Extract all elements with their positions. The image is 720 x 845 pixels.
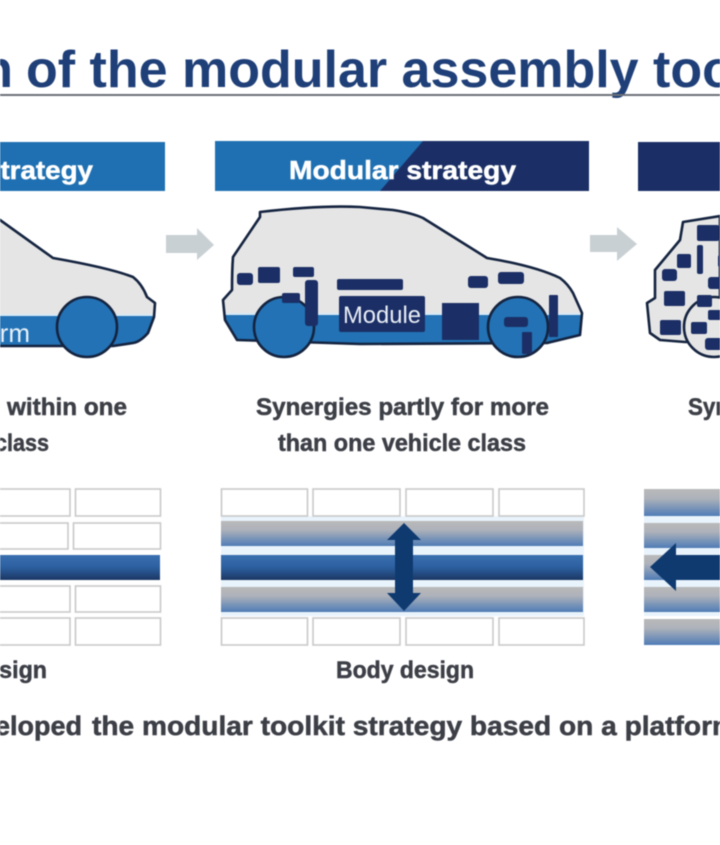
diagram: platform body design grid xyxy=(0,489,160,645)
module blocks xyxy=(237,267,558,354)
panel: modular toolkit strategy xyxy=(638,142,720,645)
arrow: modular to toolkit xyxy=(590,227,637,261)
diagram: toolkit body design stripes xyxy=(644,489,720,645)
arrow: platform to modular xyxy=(166,228,214,260)
footer statement: the modular toolkit strategy based on a platform xyxy=(92,711,720,741)
caption: platform strategy xyxy=(0,394,127,457)
car: platform strategy xyxy=(0,213,165,357)
car: toolkit strategy xyxy=(647,216,720,357)
wheels xyxy=(254,297,548,357)
module label: Module xyxy=(343,302,421,329)
panel: platform strategy xyxy=(0,142,165,684)
diagram: modular body design grid xyxy=(221,489,584,645)
header bar: modular strategy: Modular strategy xyxy=(289,155,517,185)
panel: modular strategy xyxy=(215,141,590,684)
label: body design: Body design xyxy=(336,657,474,684)
header bar: platform strategy xyxy=(0,142,165,191)
module label xyxy=(339,296,425,332)
arrow: vertical double xyxy=(387,523,421,611)
module blocks xyxy=(660,225,720,350)
header bar: toolkit strategy xyxy=(638,142,720,191)
caption: platform strategy: within one xyxy=(6,394,127,421)
car: modular strategy xyxy=(215,207,590,357)
arrow: horizontal xyxy=(650,543,720,591)
caption: modular strategy xyxy=(256,394,549,457)
caption: modular strategy: than one vehicle class xyxy=(278,430,526,457)
header bar: modular strategy xyxy=(215,141,589,191)
caption: modular strategy: Synergies partly for more xyxy=(256,394,549,421)
